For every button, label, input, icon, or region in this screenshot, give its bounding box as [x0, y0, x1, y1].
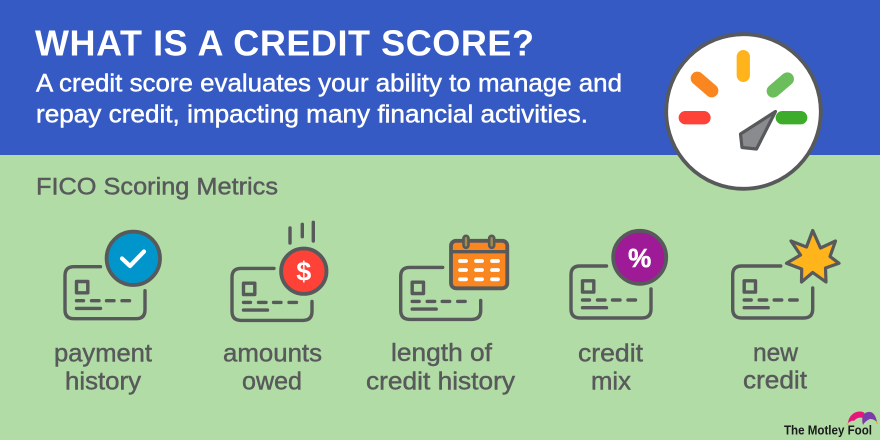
metric: new credit: new [753, 339, 799, 367]
header band [0, 0, 880, 155]
metric: payment history: payment [54, 340, 152, 368]
metric: new credit [733, 230, 839, 395]
metric: payment history: history [65, 367, 142, 395]
metric: credit mix: mix [591, 367, 632, 395]
metric: new credit: credit [743, 367, 807, 395]
metric: amounts owed: amounts [223, 340, 322, 368]
metric: length of credit history: length of [391, 339, 492, 367]
logo: The Motley Fool: The Motley Fool [784, 422, 872, 438]
heading: FICO Scoring Metrics: FICO Scoring Metrics [36, 174, 278, 201]
subtitle [36, 70, 622, 129]
logo: The Motley Fool [784, 411, 878, 438]
metric: credit mix: credit [578, 340, 643, 368]
icon: speedometer gauge [666, 34, 821, 189]
metric: amounts owed [223, 222, 326, 395]
metric: amounts owed: $ [296, 256, 311, 286]
metric: length of credit history: credit history [366, 367, 516, 395]
metric: credit mix: % [628, 243, 651, 273]
metric: amounts owed: owed [242, 367, 302, 395]
title: WHAT IS A CREDIT SCORE? [35, 22, 534, 64]
subtitle: A credit score evaluates your ability to manage and [36, 70, 622, 98]
metric: payment history [54, 232, 160, 395]
metric: length of credit history [366, 236, 516, 395]
metric: credit mix [571, 231, 666, 395]
subtitle: repay credit, impacting many financial activities. [36, 101, 588, 129]
